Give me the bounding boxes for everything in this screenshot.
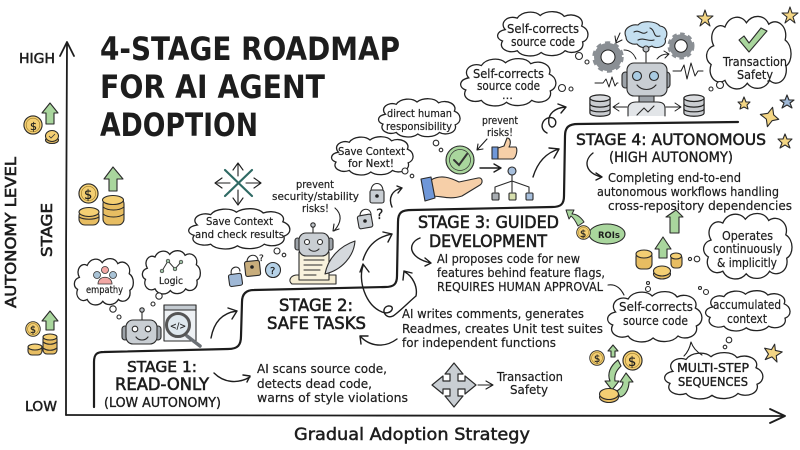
stage 1 heading: READ-ONLY — [115, 375, 210, 395]
arrow: prevent risks to check — [477, 139, 487, 150]
icon: code window and magnifier — [164, 305, 200, 346]
stage 2 description: for independent functions — [402, 335, 556, 350]
y axis arrow — [60, 42, 74, 415]
cloud: empathy: empathy — [86, 285, 123, 296]
stage 3 description: AI proposes code for new — [437, 252, 580, 266]
arrow: stage 2 to description — [360, 336, 397, 345]
text: prevent security stability risks: prevent — [296, 178, 335, 191]
stage 4 heading: (HIGH AUTONOMY) — [609, 150, 733, 166]
text: prevent risks: prevent — [482, 114, 519, 127]
stage 1 heading: STAGE 1: — [127, 358, 197, 376]
stage 4 description: Completing end-to-end — [608, 171, 741, 185]
stage 3 heading: STAGE 3: GUIDED — [418, 213, 559, 233]
text: transaction safety: Transaction — [496, 370, 563, 384]
icon: coins with circular arrows: $ — [628, 355, 636, 370]
icon: locks stage 2: ? — [270, 266, 275, 277]
icon: four-way arrow — [432, 363, 476, 407]
cloud: transaction safety — [707, 16, 791, 91]
x axis arrow — [66, 409, 785, 423]
icon: robot stage 1 — [122, 308, 161, 344]
staircase line — [94, 122, 738, 407]
arrow: risks to robot — [333, 208, 340, 231]
stage 3 description: REQUIRES HUMAN APPROVAL — [437, 280, 603, 294]
icon: locks stage 2 — [228, 254, 280, 287]
icon: left coins middle: $ — [84, 188, 92, 203]
arrow: check to hierarchy — [480, 164, 501, 172]
cloud: self-corrects source code (top): source code — [511, 35, 575, 49]
cloud: empathy — [74, 259, 133, 319]
cloud: transaction safety: Transaction — [722, 55, 787, 69]
stage 4 description — [597, 171, 792, 213]
icon: coins with circular arrows: $ — [594, 354, 600, 365]
title: FOR AI AGENT — [100, 68, 325, 106]
icon: pulse right — [673, 63, 703, 79]
icon: robot and scroll with quill — [290, 223, 355, 284]
arrow: stage 1 to description — [214, 373, 250, 382]
text: prevent security stability risks — [272, 178, 359, 215]
cloud: self-corrects source code (second): ... — [502, 88, 513, 102]
icon: locks stage 3: ? — [376, 207, 383, 223]
title: ADOPTION — [100, 106, 258, 144]
icon: compass arrows — [215, 163, 261, 205]
cloud: multi-step sequences — [665, 337, 763, 399]
arrow: four-way to transaction safety — [478, 381, 493, 389]
arrow: stage 3 to description — [412, 238, 431, 266]
cloud: save context for next: Save Context — [338, 145, 406, 158]
arrow: stage 4 to description — [587, 153, 602, 180]
cloud: accumulated context — [698, 286, 790, 331]
axis label: low: LOW — [25, 400, 57, 415]
cloud: self-corrects source code (top) — [498, 12, 589, 64]
stage 3 heading — [418, 213, 559, 252]
cloud: direct human responsibility — [379, 99, 460, 152]
arrow: database left to robot — [613, 103, 627, 111]
cloud: self-corrects source code (second): Self-corrects — [473, 67, 544, 81]
icon: database left — [590, 95, 610, 116]
cloud: save context for next: for Next! — [348, 157, 394, 170]
stars — [697, 7, 798, 363]
looping arrow — [360, 264, 416, 317]
text: prevent security stability risks: security/stability — [272, 190, 359, 203]
arrow: green to stage 4 — [566, 210, 584, 226]
icon: locks stage 3 — [357, 184, 384, 229]
icon: left coins top — [24, 103, 59, 144]
icon: gear left — [594, 43, 622, 71]
cloud: self-corrects source code (lower): Self-corrects — [619, 300, 693, 314]
cloud: operates continuously — [688, 214, 792, 279]
badge: ROIs — [577, 224, 625, 244]
icon: left coins middle — [79, 167, 124, 225]
axis label: gradual adoption strategy: Gradual Adoption Strategy — [294, 425, 530, 445]
icon: code window and magnifier: </> — [170, 322, 186, 332]
icon: left coins top: $ — [30, 120, 37, 133]
cloud: save context and check results: Save Context — [206, 215, 274, 228]
icon: check in hand — [421, 146, 482, 201]
icon: thumbs up — [492, 138, 517, 159]
cloud: operates continuously: & implicitly — [717, 256, 777, 270]
cloud: accumulated context: accumulated — [713, 298, 781, 312]
text: transaction safety: Safety — [510, 383, 548, 397]
cloud: direct human responsibility: direct human — [387, 107, 452, 120]
text: prevent security stability risks: risks! — [302, 202, 329, 215]
icon: hierarchy — [492, 167, 533, 200]
stage 4 heading: STAGE 4: AUTONOMOUS — [576, 130, 766, 149]
icon: left coins bottom: $ — [30, 325, 36, 336]
title — [100, 30, 400, 144]
icon: pulse left — [595, 77, 618, 87]
arrows around brain — [615, 33, 669, 59]
stage 1 heading: (LOW AUTONOMY) — [104, 396, 221, 411]
arrow: robot to database right — [666, 103, 681, 111]
text: prevent risks: risks! — [487, 126, 513, 139]
stage 1 description: warns of style violations — [257, 391, 408, 405]
stage 4 description: autonomous workflows handling — [597, 185, 779, 199]
cloud: logic — [142, 251, 200, 306]
cloud: multi-step sequences: MULTI-STEP — [677, 361, 749, 375]
stage 2 description: AI writes comments, generates — [402, 306, 584, 321]
cloud: self-corrects source code (lower): source code — [623, 314, 688, 328]
cloud: direct human responsibility: responsibility — [386, 120, 452, 133]
cloud: logic: Logic — [159, 276, 183, 287]
axis label: high: HIGH — [19, 52, 55, 67]
connector: approval to cloud — [608, 285, 624, 295]
stage 2 heading: SAFE TASKS — [267, 314, 366, 334]
stage 1 description: AI scans source code, — [257, 362, 387, 376]
badge: ROIs: $ — [580, 229, 586, 240]
cloud: self-corrects source code (lower) — [608, 282, 702, 342]
cloud: self-corrects source code (second) — [461, 59, 573, 106]
stage 2 description — [402, 306, 603, 350]
stage 4 heading — [576, 130, 766, 166]
arrow: locks to hand — [390, 186, 402, 207]
cloud: save context for next — [332, 137, 414, 178]
stage 4 description: cross-repository dependencies — [608, 199, 792, 213]
stage 2 heading — [267, 296, 366, 334]
cloud: operates continuously: continuously — [713, 242, 782, 256]
axis label: stage: STAGE — [38, 203, 56, 257]
icon: coins with circular arrows — [590, 345, 642, 402]
icon: database right — [684, 95, 704, 116]
icon: coins with growth arrows — [636, 210, 683, 279]
arrow: stage 2 to stage 3 — [363, 232, 392, 260]
stage 3 heading: DEVELOPMENT — [429, 232, 548, 252]
stage 1 description — [257, 362, 408, 405]
stage 3 description: features behind feature flags, — [437, 266, 605, 280]
cloud: self-corrects source code (top): Self-corrects — [507, 22, 579, 36]
stage 2 description: Readmes, creates Unit test suites — [402, 321, 603, 336]
text: prevent risks — [482, 114, 519, 139]
cloud: operates continuously: Operates — [722, 229, 773, 243]
axis label: autonomy level: AUTONOMY LEVEL — [2, 156, 20, 308]
cloud: accumulated context: context — [727, 312, 767, 326]
arrow: stage 3 to stage 4 — [533, 148, 559, 177]
icon: locks stage 2: ? — [259, 254, 264, 264]
cloud: self-corrects source code (second): source code — [477, 79, 540, 93]
stage 2 heading: STAGE 2: — [279, 296, 353, 316]
title: 4-STAGE ROADMAP — [100, 30, 400, 68]
cloud: multi-step sequences: SEQUENCES — [678, 375, 748, 389]
stage 1 heading — [104, 358, 221, 411]
icon: brain — [625, 22, 667, 48]
stage 3 description — [437, 252, 605, 294]
cloud: transaction safety: Safety — [737, 68, 773, 82]
text: transaction safety — [496, 370, 563, 397]
icon: gear right — [669, 34, 693, 58]
arrow: stage 1 to stage 2 — [211, 308, 237, 338]
icon: left coins bottom — [26, 311, 58, 355]
icon: autonomous robot — [622, 46, 670, 116]
spiral arrow — [542, 104, 566, 133]
cloud: save context and check results — [189, 209, 290, 257]
badge: ROIs: ROIs — [598, 231, 620, 241]
cloud: save context and check results: and check results — [195, 228, 284, 241]
stage 1 description: detects dead code, — [257, 377, 372, 391]
